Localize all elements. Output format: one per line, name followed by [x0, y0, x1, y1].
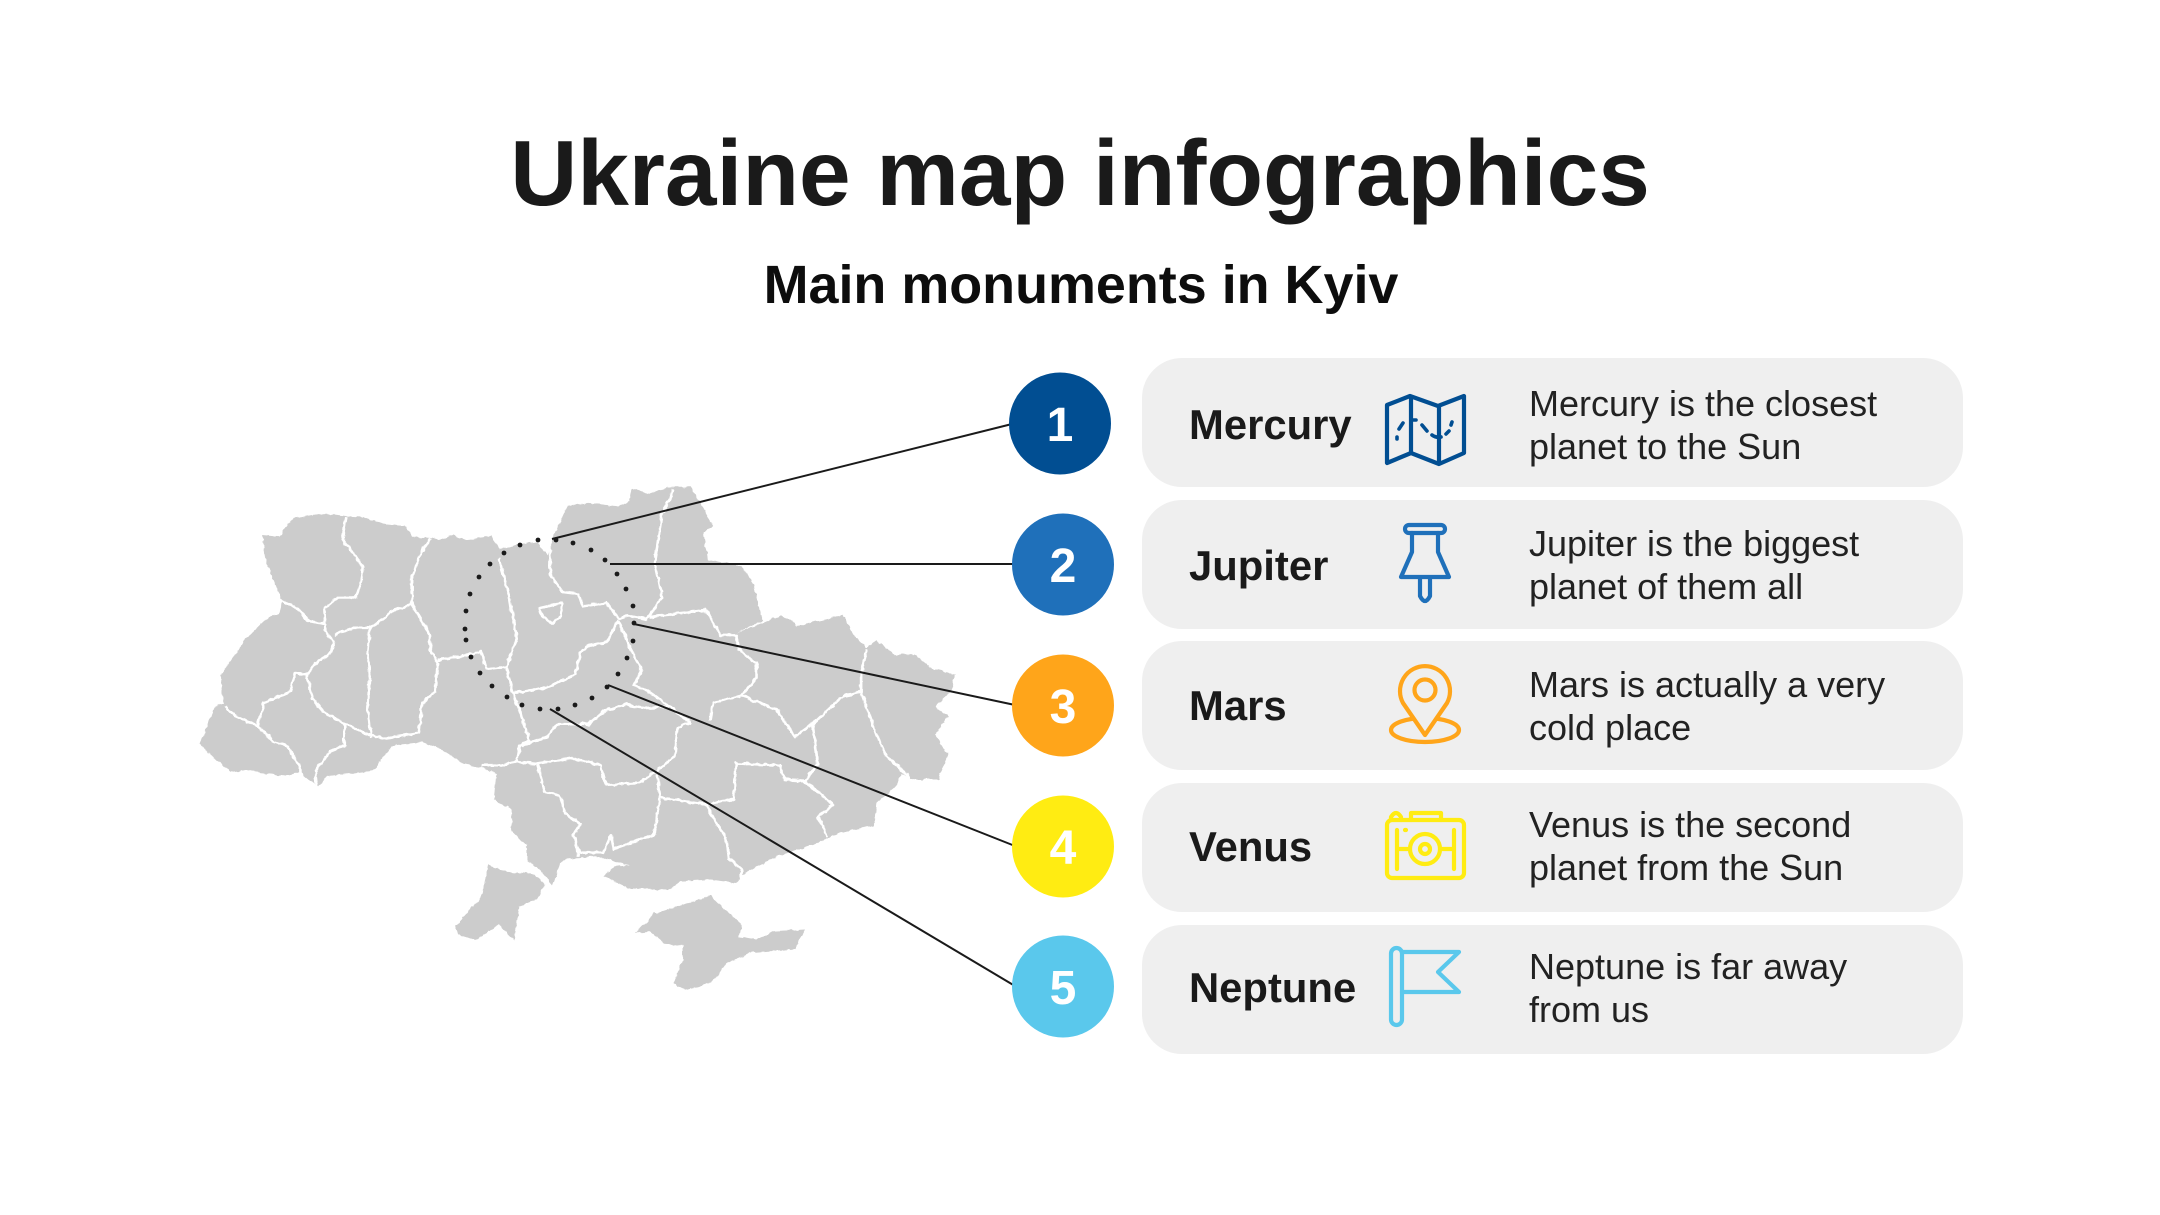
description 1: planet to the Sun — [1529, 426, 1801, 467]
number badge 1 — [1009, 372, 1111, 474]
description 2: planet of them all — [1529, 566, 1803, 607]
connector line 1 — [552, 424, 1012, 539]
icon: camera — [1387, 813, 1464, 878]
map: mainland silhouette — [199, 487, 956, 890]
row 5: Neptune — [1012, 925, 1963, 1054]
connector line 3 — [634, 624, 1015, 705]
card 4 background — [1142, 783, 1963, 912]
name: Jupiter: Jupiter — [1189, 542, 1328, 589]
description 4: planet from the Sun — [1529, 847, 1843, 888]
row 1: Mercury — [1009, 358, 1963, 487]
number badge 5 — [1012, 936, 1114, 1038]
number badge 3: 3 — [1050, 681, 1076, 734]
map: Odesa coast — [456, 865, 545, 940]
map: Crimea — [636, 896, 805, 990]
number badge 2: 2 — [1050, 540, 1076, 593]
icon: flag — [1391, 948, 1459, 1025]
icon: push pin — [1401, 525, 1449, 601]
row 2: Jupiter — [1012, 500, 1963, 629]
description 4: Venus is the second — [1529, 804, 1851, 845]
description 2: Jupiter is the biggest — [1529, 523, 1859, 564]
icon: location marker — [1391, 666, 1459, 742]
connector line 5 — [550, 709, 1015, 986]
name: Mercury: Mercury — [1189, 401, 1352, 448]
title: Ukraine map infographics — [510, 121, 1650, 225]
description 3: cold place — [1529, 707, 1691, 748]
name: Neptune: Neptune — [1189, 964, 1356, 1011]
dotted circle around Kyiv — [463, 538, 636, 711]
card 1 background — [1142, 358, 1963, 487]
name: Mars: Mars — [1189, 682, 1287, 729]
number badge 1: 1 — [1047, 399, 1073, 452]
subtitle: Main monuments in Kyiv — [764, 255, 1398, 315]
map: oblast borders — [226, 489, 910, 878]
connector line 2 — [610, 563, 1015, 565]
row 4: Venus — [1012, 783, 1963, 912]
number badge 4 — [1012, 796, 1114, 898]
row 3: Mars — [1012, 641, 1963, 770]
description 3: Mars is actually a very — [1529, 664, 1885, 705]
connector line 4 — [608, 685, 1015, 846]
number badge 4: 4 — [1050, 822, 1077, 875]
card 5 background — [1142, 925, 1963, 1054]
name: Venus: Venus — [1189, 823, 1312, 870]
description 1: Mercury is the closest — [1529, 383, 1877, 424]
number badge 2 — [1012, 514, 1114, 616]
card 3 background — [1142, 641, 1963, 770]
description 5: from us — [1529, 989, 1649, 1030]
number badge 3 — [1012, 654, 1114, 756]
map of Ukraine — [199, 487, 956, 990]
number badge 5: 5 — [1050, 962, 1076, 1015]
description 5: Neptune is far away — [1529, 946, 1847, 987]
icon: folded map — [1387, 396, 1464, 464]
card 2 background — [1142, 500, 1963, 629]
